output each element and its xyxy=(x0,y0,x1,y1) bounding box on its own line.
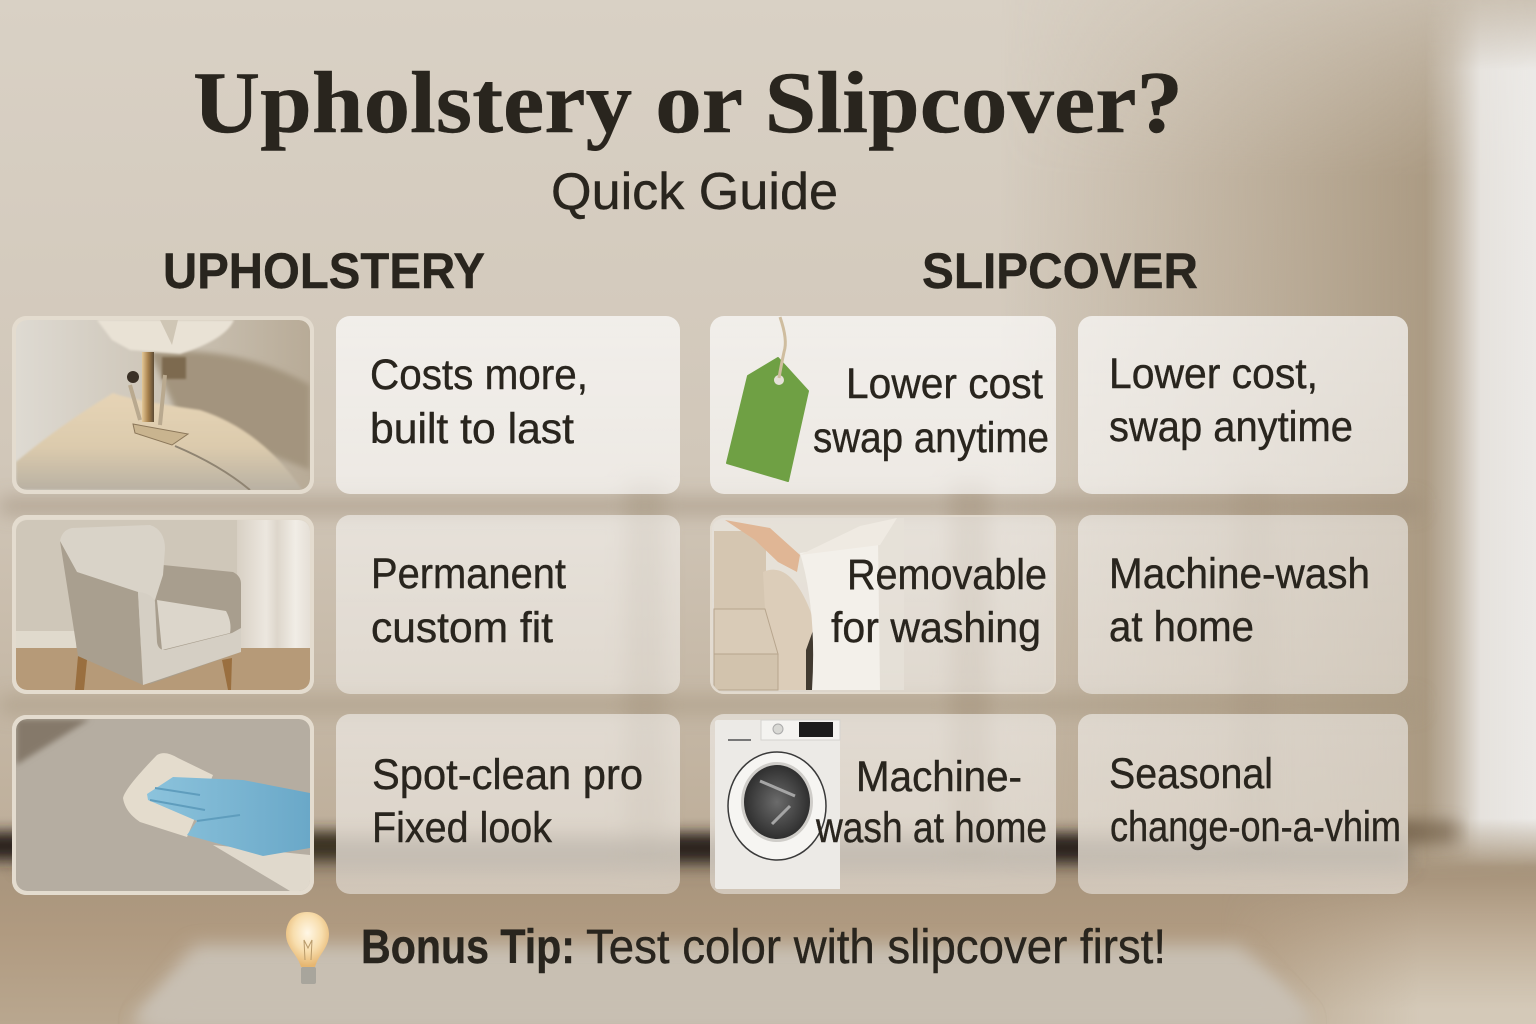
text card: machine-wash at home: Machine-wash xyxy=(1109,550,1370,598)
icon: green price tag xyxy=(727,317,808,481)
text card: permanent custom fit: Permanent xyxy=(371,550,566,598)
text card: removable with slipcover photo: Removable xyxy=(847,551,1047,599)
text card: lower cost swap anytime: Lower cost, xyxy=(1109,350,1318,398)
text card: lower cost swap anytime xyxy=(1078,316,1408,494)
text card: lower cost with price tag: swap anytime xyxy=(813,414,1049,462)
text card: lower cost with price tag xyxy=(710,316,1056,494)
heading: slipcover: SLIPCOVER xyxy=(922,243,1198,299)
heading: upholstery: UPHOLSTERY xyxy=(163,243,485,299)
subtitle: Quick Guide xyxy=(551,163,838,221)
text card: seasonal change: Seasonal xyxy=(1109,750,1273,798)
text card: seasonal change xyxy=(1078,714,1408,894)
icon: armchair drawing xyxy=(60,525,241,690)
image card: sewing machine xyxy=(12,316,314,494)
bonus tip: Bonus Tip: xyxy=(361,921,575,974)
image card: gloved hand cleaning xyxy=(12,715,314,895)
text card: costs more: built to last xyxy=(370,405,574,453)
image card: armchair xyxy=(12,515,314,694)
title: Upholstery or Slipcover? xyxy=(193,55,1183,152)
bonus tip: Test color with slipcover first! xyxy=(586,921,1166,974)
dark band in gaps between cards xyxy=(0,820,1470,862)
text card: costs more xyxy=(336,316,680,494)
icon: washing machine xyxy=(715,720,840,889)
text card: lower cost with price tag: Lower cost xyxy=(846,360,1043,408)
text card: spot-clean pro xyxy=(336,714,680,894)
text card: costs more: Costs more, xyxy=(370,351,588,399)
text card: machine-wash at home xyxy=(1078,515,1408,694)
text card: seasonal change: change-on-a-vhim xyxy=(1110,803,1401,851)
text card: machine-wash with washer: wash at home xyxy=(815,804,1047,852)
bonus tip xyxy=(361,921,1166,974)
text card: machine-wash at home: at home xyxy=(1109,603,1254,651)
text card: removable with slipcover photo xyxy=(710,515,1056,694)
text card: machine-wash with washer: Machine- xyxy=(856,753,1022,801)
text card: spot-clean pro: Spot-clean pro xyxy=(372,751,643,799)
text card: removable with slipcover photo: for washing xyxy=(831,604,1041,652)
text card: spot-clean pro: Fixed look xyxy=(372,804,552,852)
text card: machine-wash with washer xyxy=(710,714,1056,894)
text card: permanent custom fit xyxy=(336,515,680,694)
text card: lower cost swap anytime: swap anytime xyxy=(1109,403,1353,451)
text card: permanent custom fit: custom fit xyxy=(371,604,553,652)
icon: light bulb xyxy=(286,912,329,984)
